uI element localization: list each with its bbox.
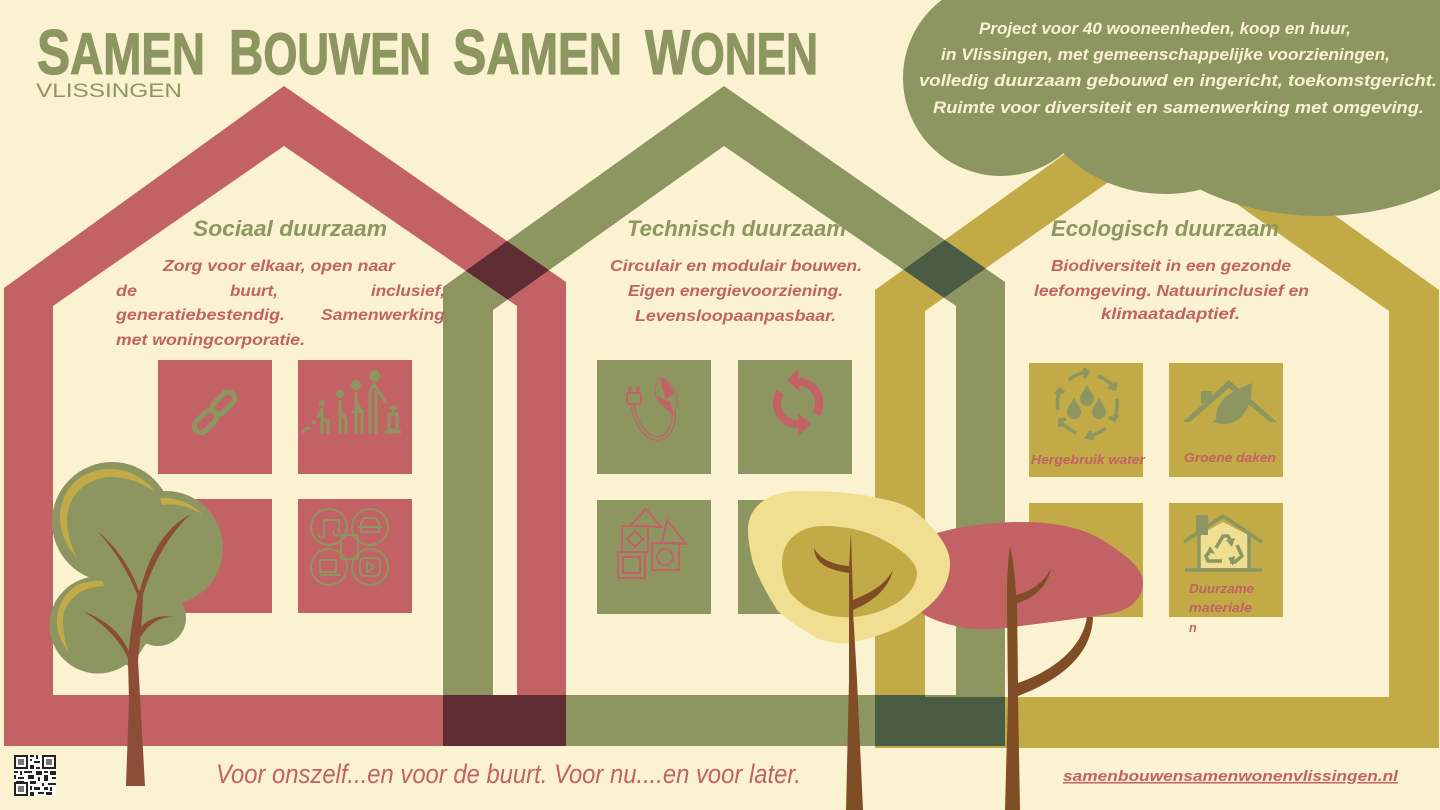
text block: project description — [919, 20, 1437, 117]
icon: building blocks — [618, 509, 686, 578]
text block: project description: Project voor 40 wooneenheden, koop en huur, — [979, 20, 1351, 38]
qr code — [14, 755, 56, 796]
text block: sociaal: inclusief, — [371, 283, 445, 300]
title: BOUWEN — [229, 18, 431, 88]
text block: sociaal: Zorg voor elkaar, open naar — [162, 258, 396, 275]
text block: sociaal: buurt, — [230, 283, 278, 300]
panel: ecological house outline — [875, 88, 1439, 748]
illustration: yellow tree — [748, 491, 950, 810]
icon: water reuse — [1056, 369, 1118, 439]
title: SAMEN — [37, 18, 205, 88]
text block: technisch: Eigen energievoorziening. — [628, 283, 843, 300]
subtitle: VLISSINGEN — [36, 81, 182, 102]
title: WONEN — [645, 18, 818, 88]
panel: technical tiles — [597, 360, 852, 614]
panel: ecological text — [1034, 216, 1309, 323]
label: duurzame materialen: Duurzame — [1189, 582, 1254, 596]
text block: ecologisch — [1034, 258, 1309, 323]
text block: ecologisch: Biodiversiteit in een gezonde — [1051, 258, 1291, 275]
website link: samenbouwensamenwonenvlissingen.nl — [1063, 768, 1399, 785]
icon: generations — [303, 370, 401, 434]
text block: sociaal — [115, 258, 445, 349]
label: duurzame materialen — [1189, 582, 1254, 635]
illustration: pink tree — [911, 522, 1143, 810]
text block: sociaal: generatiebestendig. — [115, 307, 285, 324]
icon: refresh arrows — [777, 369, 819, 436]
text block: technisch — [610, 258, 862, 325]
icon: green roof — [1183, 380, 1277, 424]
panel: social text — [115, 216, 445, 349]
text block: project description: volledig duurzaam gebouwd en ingericht, toekomstgericht. — [919, 72, 1437, 90]
icon: plug with leaf — [627, 377, 677, 440]
heading: sociaal: Sociaal duurzaam — [193, 216, 387, 241]
text block: technisch: Levensloopaanpasbaar. — [635, 308, 836, 325]
tagline: Voor onszelf...en voor de buurt. Voor nu....en voor later. — [216, 759, 801, 789]
text block: sociaal: met woningcorporatie. — [116, 332, 305, 349]
panel: technical text — [610, 216, 862, 325]
heading: ecologisch: Ecologisch duurzaam — [1051, 216, 1279, 241]
text block: sociaal: de — [116, 283, 137, 300]
text block: project description: Ruimte voor diversiteit en samenwerking met omgeving. — [933, 99, 1424, 117]
panel: social house outline — [4, 86, 566, 746]
title: SAMEN — [453, 18, 622, 88]
panel: technical house outline — [443, 86, 1005, 746]
icon: recycled house — [1184, 515, 1262, 570]
text block: ecologisch: leefomgeving. Natuurinclusief en — [1034, 283, 1309, 300]
label: duurzame materialen: n — [1189, 621, 1197, 635]
text block: ecologisch: klimaatadaptief. — [1101, 306, 1240, 323]
label: duurzame materialen: materiale — [1189, 601, 1252, 615]
icon: connected media — [311, 509, 388, 585]
overlap: social and technical houses — [443, 241, 566, 746]
label: hergebruik water: Hergebruik water — [1031, 453, 1146, 467]
panel: ecological tiles — [1029, 363, 1283, 617]
panel: project description cloud — [903, 0, 1440, 216]
label: groene daken: Groene daken — [1184, 451, 1276, 465]
title — [37, 18, 818, 88]
overlap: technical and ecological houses — [875, 240, 1005, 746]
icon: chain link — [192, 389, 237, 435]
heading: technisch: Technisch duurzaam — [627, 216, 846, 241]
panel: social tiles — [158, 360, 412, 613]
text block: project description: in Vlissingen, met gemeenschappelijke voorzieningen, — [941, 46, 1390, 64]
illustration: green tree — [50, 462, 223, 786]
text block: sociaal: Samenwerking — [321, 307, 445, 324]
text block: technisch: Circulair en modulair bouwen. — [610, 258, 862, 275]
